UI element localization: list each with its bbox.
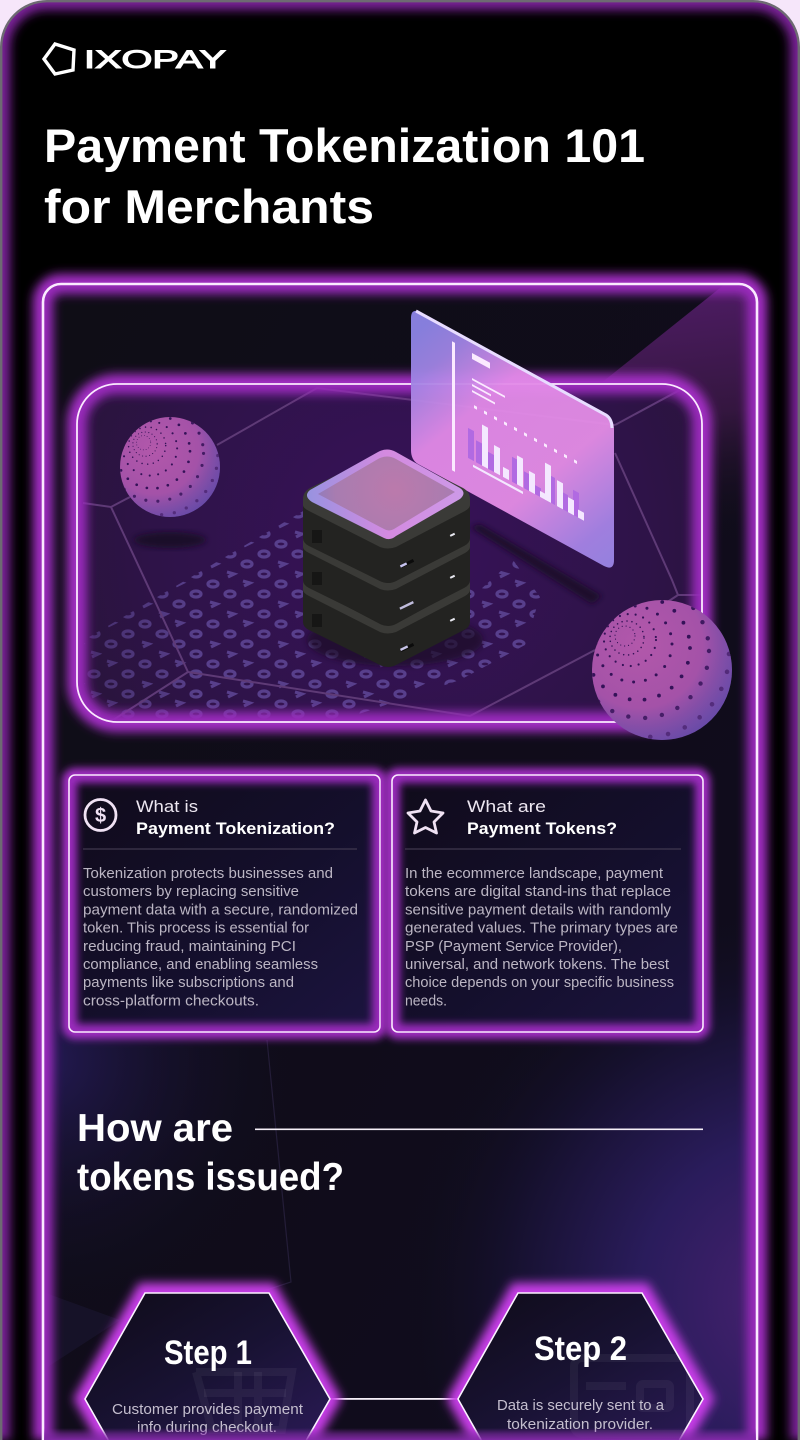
logo: IXOPAY (44, 44, 226, 74)
card heading: What are (467, 797, 546, 816)
card heading (467, 797, 617, 838)
card body text: payment data with a secure, randomized (83, 902, 358, 918)
step 2 text: Data is securely sent to a (497, 1398, 665, 1414)
title (44, 119, 645, 233)
card body text: reducing fraud, maintaining PCI (83, 939, 296, 955)
card heading (136, 797, 335, 838)
server layer 3 (303, 535, 470, 667)
card body text (405, 866, 678, 1010)
title: for Merchants (44, 180, 374, 233)
icon: dollar coin: $ (95, 805, 106, 827)
bottom edge glow (44, 1428, 756, 1440)
step 2 text (497, 1398, 665, 1433)
section heading: How are tokens issued?: tokens issued? (77, 1156, 344, 1199)
glass plate (307, 450, 464, 539)
server layer 2 (303, 492, 470, 625)
step 1 label: Step 1 (164, 1334, 252, 1372)
card heading: Payment Tokenization? (136, 819, 335, 838)
heading rule (255, 1128, 703, 1130)
step 2 text: tokenization provider. (507, 1417, 653, 1433)
card body text: token. This process is essential for (83, 920, 309, 936)
logo: IXOPAY: IXOPAY (84, 46, 226, 74)
card body text: generated values. The primary types are (405, 920, 678, 936)
server layer 1 (303, 450, 470, 583)
step 1 text: Customer provides payment (112, 1402, 303, 1418)
card heading: Payment Tokens? (467, 819, 617, 838)
step 1 text (112, 1402, 303, 1436)
step 2 label: Step 2 (534, 1330, 627, 1368)
main panel (43, 284, 757, 1440)
small dotted sphere (82, 376, 246, 548)
large dotted sphere (539, 543, 769, 773)
card body text: Tokenization protects businesses and (83, 866, 333, 882)
connector line between steps (330, 1398, 458, 1400)
card body text: sensitive payment details with randomly (405, 902, 672, 918)
section heading: How are tokens issued?: How are (77, 1107, 233, 1150)
card body text: cross-platform checkouts. (83, 994, 259, 1010)
server stack (303, 450, 483, 667)
card body text: customers by replacing sensitive (83, 884, 299, 900)
card body text (83, 866, 358, 1010)
card body text: universal, and network tokens. The best (405, 957, 669, 973)
card body text: needs. (405, 994, 447, 1010)
icon: faint device (574, 1358, 690, 1434)
card: What are Payment Tokens? (392, 775, 703, 1032)
step 1 hexagon (85, 1293, 330, 1440)
card: What is Payment Tokenization? (69, 775, 380, 1032)
binary floor pattern (84, 511, 540, 718)
step 1 text: info during checkout. (137, 1420, 277, 1436)
icon: faint cart (196, 1372, 292, 1430)
icon: dollar coin (85, 800, 116, 830)
floating chart screen (411, 311, 614, 568)
illustration panel (77, 378, 707, 725)
card body text: In the ecommerce landscape, payment (405, 866, 663, 882)
card heading: What is (136, 797, 198, 816)
card body text: payments like subscriptions and (83, 975, 294, 991)
network lines (83, 378, 702, 722)
section heading: How are tokens issued? (77, 1107, 344, 1199)
title: Payment Tokenization 101 (44, 119, 645, 172)
card body text: choice depends on your specific business (405, 975, 674, 991)
card body text: PSP (Payment Service Provider), (405, 939, 622, 955)
card body text: tokens are digital stand-ins that replace (405, 884, 671, 900)
icon: star (408, 800, 443, 833)
step 2 hexagon (458, 1293, 703, 1440)
screen shadow (470, 524, 602, 604)
card body text: compliance, and enabling seamless (83, 957, 318, 973)
